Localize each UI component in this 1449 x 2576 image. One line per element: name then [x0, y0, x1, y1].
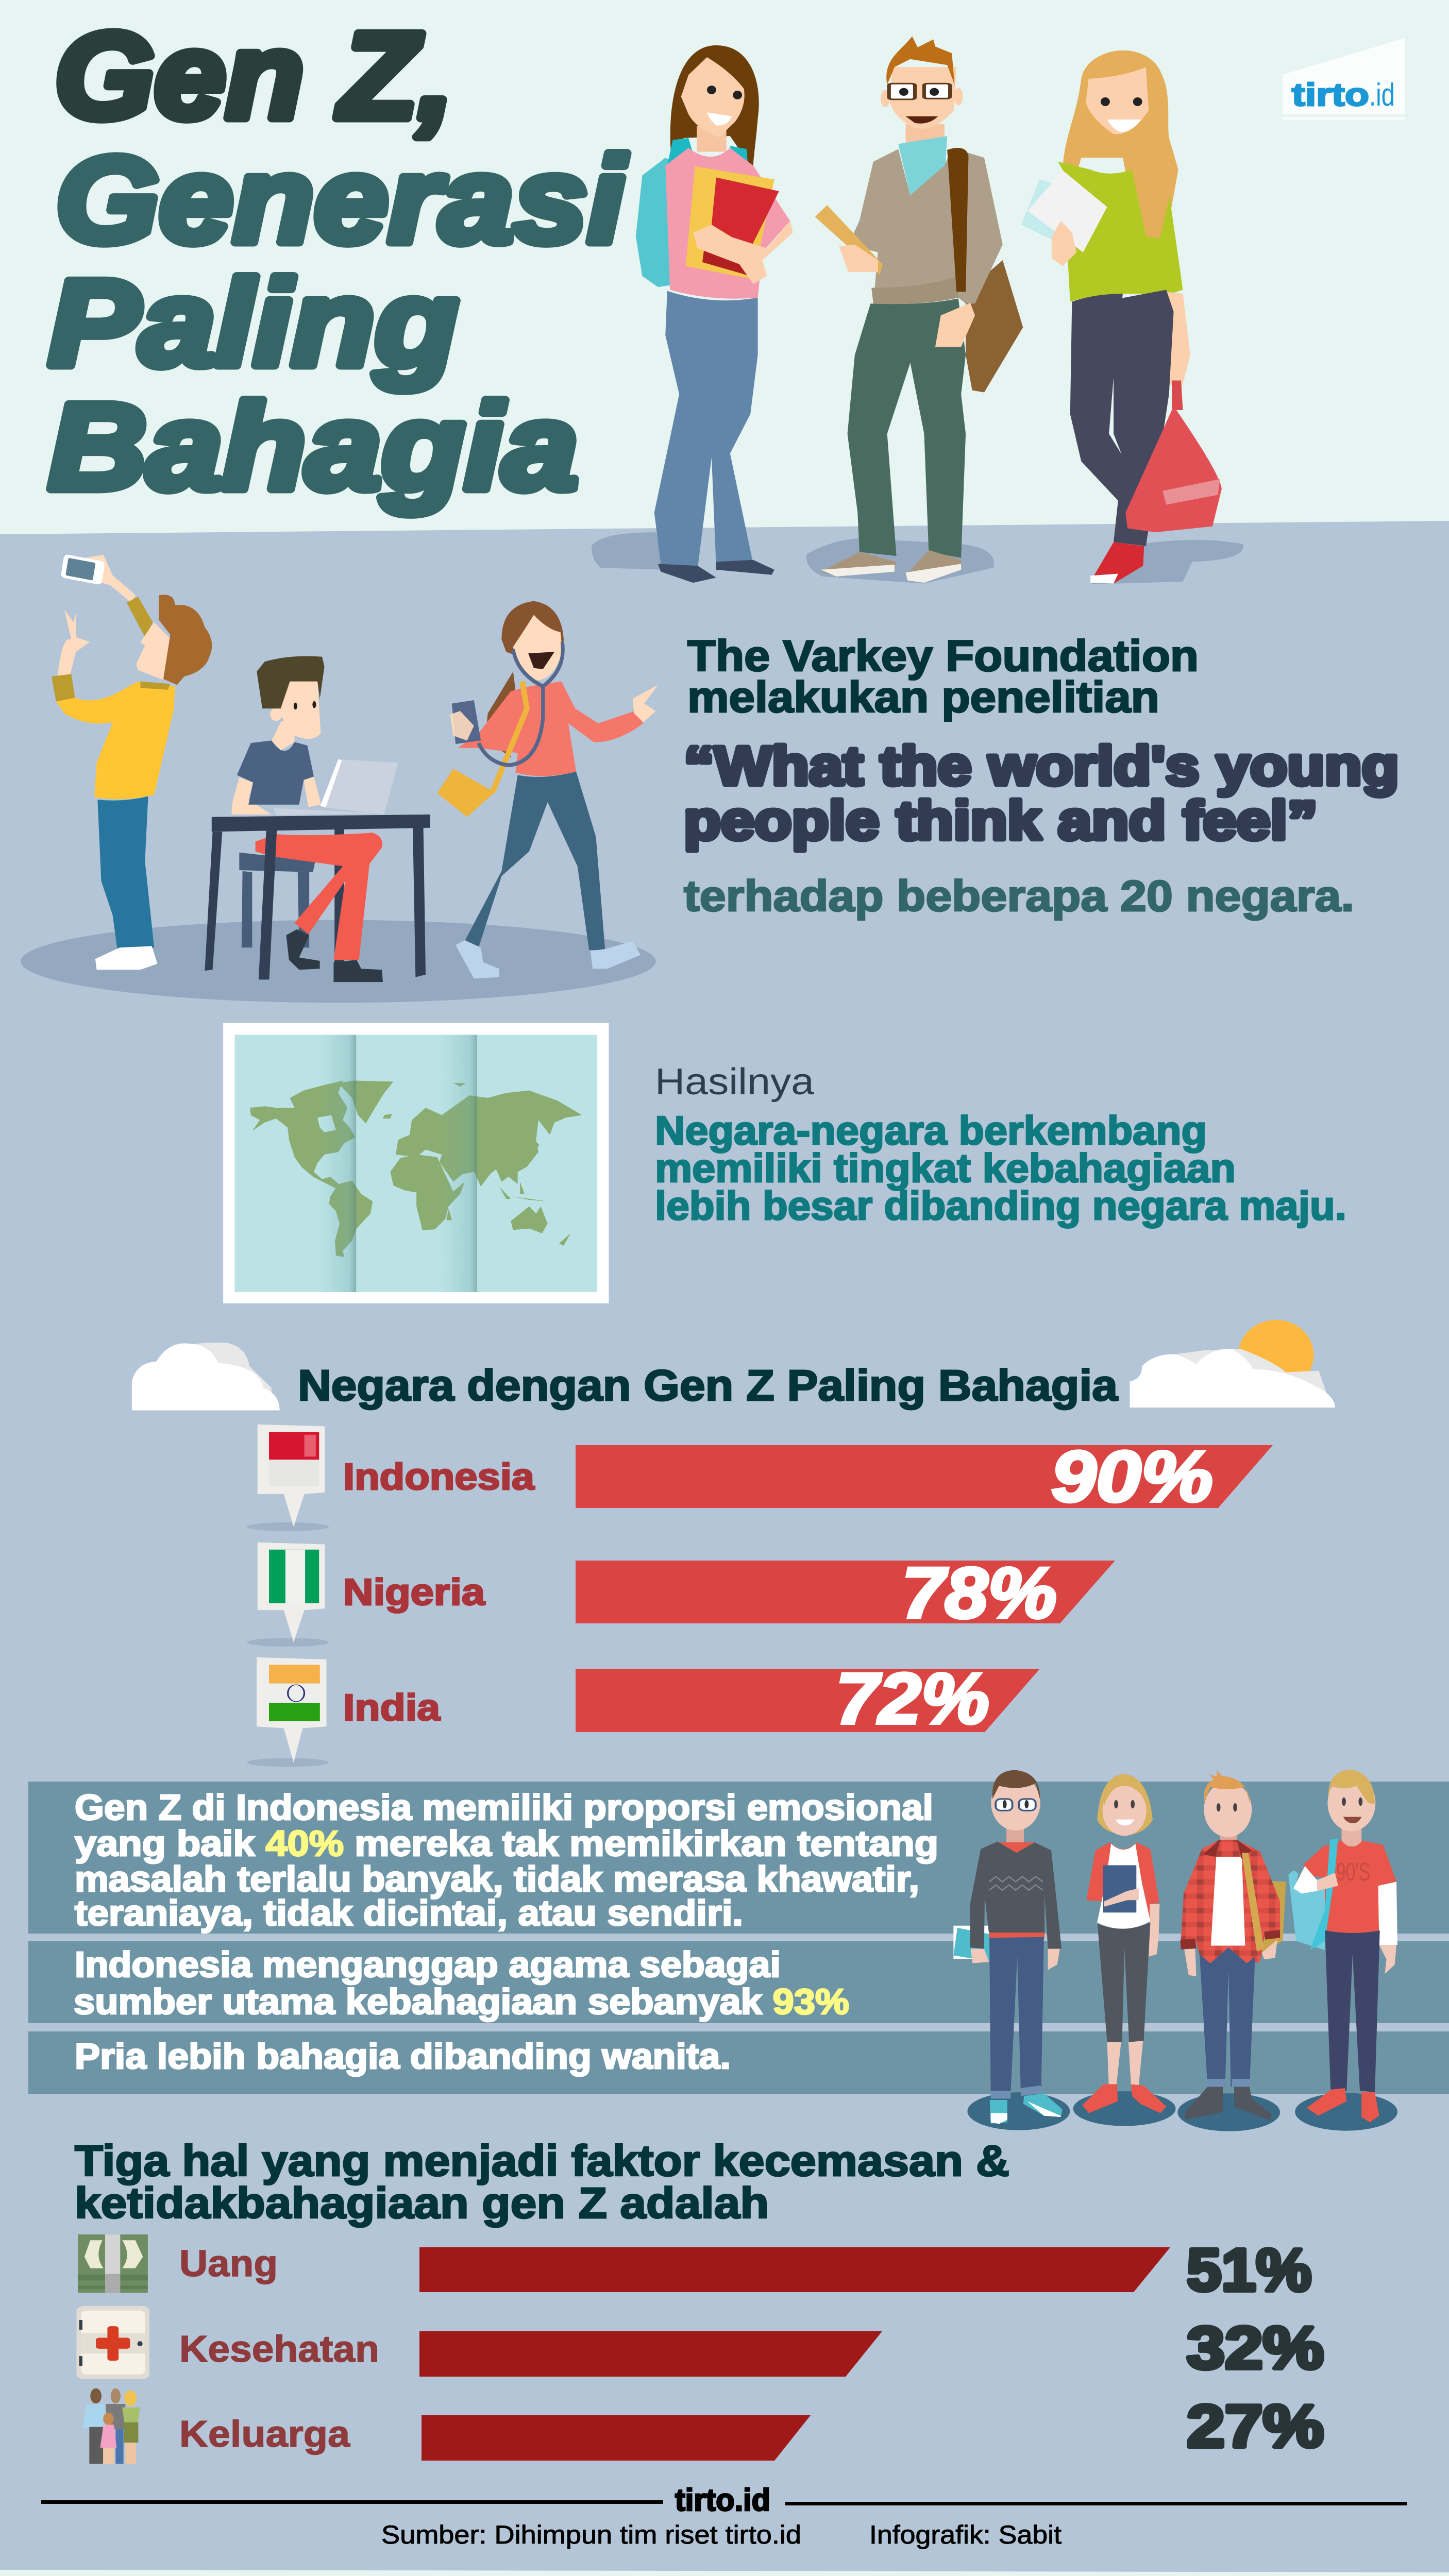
student shadows: [592, 532, 1243, 584]
person: boy with glasses and sweater: [953, 1770, 1062, 2124]
icon: money: [78, 2234, 148, 2293]
person: selfie boy: [52, 554, 212, 970]
icon: tirto.id logo: [1283, 38, 1405, 120]
label: nigeria: Nigeria: [343, 1572, 485, 1613]
finding text: [655, 1108, 1346, 1228]
person: laughing girl with phone: [437, 601, 658, 978]
text: terhadap beberapa 20 negara: terhadap beberapa 20 negara.: [684, 872, 1354, 920]
text: melakukan penelitian: melakukan penelitian: [687, 673, 1159, 721]
label: india: India: [343, 1687, 441, 1728]
footer: [41, 2483, 1407, 2549]
title: Generasi: [56, 132, 627, 268]
title: [48, 8, 627, 515]
heading: the varkey foundation: The Varkey Foundation: [687, 632, 1199, 680]
quote: study title: “What the world's young: [684, 736, 1399, 796]
value: 32%: 32%: [1187, 2314, 1324, 2381]
bar: 27%: [422, 2415, 811, 2461]
panel: men happier: Pria lebih bahagia dibanding wanita.: [75, 2036, 731, 2076]
panel: religion: Indonesia menganggap agama sebagai: [75, 1944, 781, 1985]
row: nigeria: [247, 1543, 1115, 1647]
icon: family: [83, 2388, 140, 2464]
student: girl in green top: [1021, 50, 1222, 584]
heading: anxiety factors: ketidakbahagiaan gen Z adalah: [75, 2179, 769, 2227]
floor shadows: [967, 2091, 1397, 2131]
quote: study title: [684, 736, 1399, 851]
row: uang: [78, 2234, 1311, 2303]
icon: world map: [223, 1023, 609, 1303]
bar chart: happiest countries: [247, 1425, 1273, 1767]
icon: tirto.id logo: tirto: [1292, 77, 1369, 113]
student: boy with glasses: [815, 36, 1023, 583]
footer logo text: tirto.id: [675, 2483, 770, 2517]
finding text: memiliki tingkat kebahagiaan: [655, 1145, 1236, 1191]
bar: 90%: [576, 1445, 1273, 1508]
row: keluarga: [83, 2388, 1324, 2464]
panel: emotional proportion: teraniaya, tidak dicintai, atau sendiri.: [75, 1893, 743, 1933]
person: boy at table with laptop: [205, 656, 430, 982]
graphic credit: Infografik: Sabit: [869, 2520, 1062, 2549]
illustration: four young people: [953, 1770, 1397, 2131]
title: Paling: [48, 255, 458, 392]
icon: first aid kit: [76, 2306, 149, 2379]
person: blonde girl with book: [1082, 1774, 1166, 2113]
illustration: three students: [592, 36, 1243, 584]
panel: gen z indonesia facts: [28, 1782, 1449, 2094]
quote: study title: people think and feel”: [684, 790, 1318, 851]
panel: emotional proportion: [28, 1782, 1449, 1934]
value: 78%: 78%: [902, 1552, 1057, 1633]
title: Gen Z,: [55, 8, 453, 144]
icon: india flag pin: [247, 1657, 329, 1767]
row: kesehatan: [76, 2306, 1324, 2381]
value: 90%: 90%: [1051, 1436, 1213, 1517]
icon: clouds and sun: [132, 1320, 1335, 1411]
icon: nigeria flag pin: [247, 1543, 329, 1647]
icon: tirto.id logo: .id: [1369, 77, 1395, 113]
label: indonesia: Indonesia: [343, 1456, 535, 1498]
panel: emotional proportion: Gen Z di Indonesia memiliki proporsi emosional: [75, 1787, 933, 1827]
heading: anxiety factors: [75, 2137, 1009, 2227]
bar chart: anxiety factors: [76, 2234, 1324, 2464]
panel: men happier: [28, 2031, 1449, 2094]
row: indonesia: [247, 1425, 1273, 1531]
value: 51%: 51%: [1187, 2236, 1311, 2303]
student: girl with backpack: [636, 45, 793, 583]
bar: 72%: [576, 1669, 1040, 1732]
bar: 51%: [419, 2247, 1170, 2292]
illustration: three young people with gadgets: [21, 554, 658, 1003]
text block: intro: [684, 632, 1399, 920]
panel: religion: sumber utama kebahagiaan sebanyak 93%: [74, 1981, 849, 2022]
label: uang: Uang: [179, 2243, 278, 2284]
row: india: [247, 1657, 1040, 1767]
finding text: Negara-negara berkembang: [655, 1108, 1207, 1153]
heading: anxiety factors: Tiga hal yang menjadi faktor kecemasan &: [75, 2137, 1009, 2185]
person: girl in 90's tee: 90'S: [1336, 1857, 1370, 1886]
source credit: Sumber: Dihimpun tim riset tirto.id: [381, 2520, 801, 2549]
bar: 78%: [576, 1561, 1115, 1623]
floor shadow: [21, 920, 656, 1003]
label: hasilnya: Hasilnya: [655, 1061, 815, 1103]
value: 27%: 27%: [1187, 2393, 1324, 2460]
person: girl in 90's tee: [1288, 1770, 1397, 2122]
panel: emotional proportion: masalah terlalu banyak, tidak merasa khawatir,: [75, 1859, 919, 1899]
continents: [250, 1080, 582, 1257]
person: boy in plaid shirt: [1181, 1770, 1286, 2121]
panel: emotional proportion: yang baik 40% mereka tak memikirkan tentang: [75, 1823, 938, 1863]
value: 72%: 72%: [836, 1658, 989, 1739]
label: kesehatan: Kesehatan: [179, 2329, 379, 2370]
finding text: lebih besar dibanding negara maju.: [655, 1183, 1346, 1228]
bar: 32%: [419, 2331, 882, 2377]
icon: indonesia flag pin: [247, 1425, 329, 1531]
heading: happiest countries: Negara dengan Gen Z Paling Bahagia: [298, 1361, 1118, 1410]
text block: result: [655, 1061, 1346, 1228]
title: Bahagia: [48, 379, 578, 515]
label: keluarga: Keluarga: [179, 2414, 350, 2455]
panel: religion: [28, 1941, 1449, 2023]
